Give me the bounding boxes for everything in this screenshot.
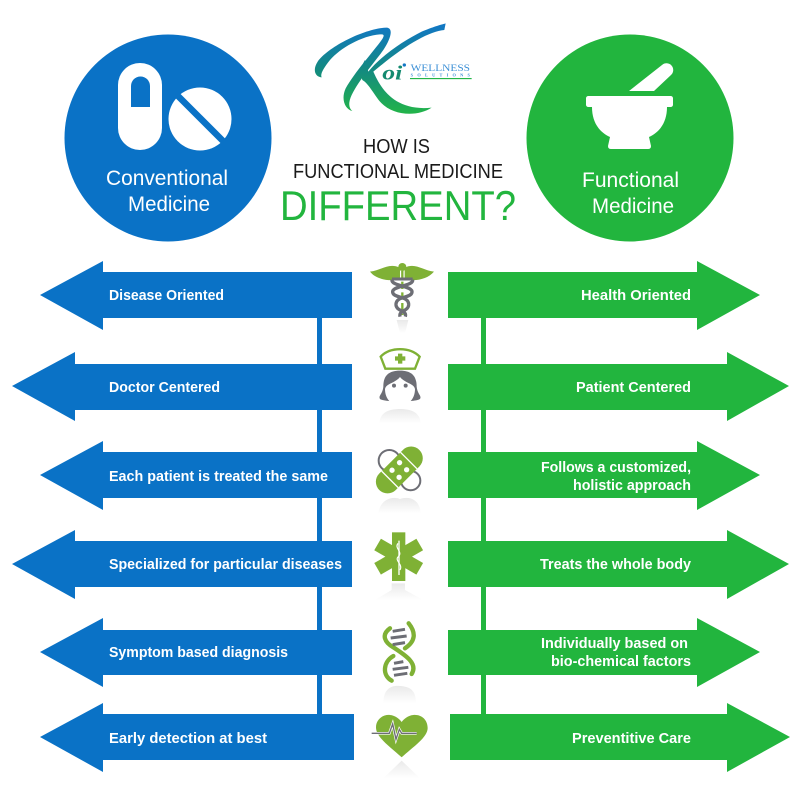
heading: Functional Medicine: Medicine: [592, 195, 674, 218]
arrow: Treats the whole body: [448, 530, 789, 599]
heading: Conventional Medicine: Conventional: [106, 167, 228, 190]
arrow: Doctor Centered: [12, 352, 352, 421]
logo: Koi Wellness Solutions: oi: [382, 62, 403, 84]
icon: caduceus: [370, 263, 434, 333]
icon: heart with pulse: [372, 715, 428, 778]
heading: Conventional Medicine: Medicine: [128, 193, 210, 216]
arrow: Patient Centered: [448, 352, 789, 421]
arrow: Doctor Centered: Doctor Centered: [109, 380, 220, 396]
title: FUNCTIONAL MEDICINE: [293, 161, 503, 183]
arrow: Patient Centered: Patient Centered: [576, 380, 691, 396]
logo: Koi Wellness Solutions: WELLNESS: [411, 63, 470, 73]
arrow: Treats the whole body: Treats the whole body: [540, 557, 691, 573]
icon: mortar and pestle: [586, 63, 673, 149]
arrow: Follows a customized, holistic approach: Follows a customized,: [541, 460, 691, 476]
icon: star of life: [374, 532, 423, 600]
arrow: Follows a customized, holistic approach: holistic approach: [573, 478, 691, 494]
arrow: Each patient is treated the same: [40, 441, 352, 510]
title: [280, 136, 516, 229]
arrow: Health Oriented: [448, 261, 760, 330]
arrow: Follows a customized, holistic approach: [448, 441, 760, 510]
title: HOW IS: [363, 136, 430, 158]
panel: functional medicine badge: [526, 34, 734, 242]
icon: capsule and tablet: [118, 63, 232, 150]
arrow: Each patient is treated the same: Each patient is treated the same: [109, 469, 328, 485]
panel: conventional medicine badge: [64, 34, 272, 242]
connector: green column line: [481, 318, 486, 714]
arrow: Disease Oriented: [40, 261, 352, 330]
title: DIFFERENT?: [280, 182, 516, 229]
arrow: Early detection at best: Early detection at best: [109, 731, 267, 747]
arrow: Specialized for particular diseases: [12, 530, 352, 599]
icon: DNA helix: [383, 623, 416, 703]
arrow: Individually based on bio-chemical factors: Individually based on: [541, 636, 688, 652]
arrow: Specialized for particular diseases: Specialized for particular diseases: [109, 557, 342, 573]
arrow: Early detection at best: [40, 703, 354, 772]
arrow: Symptom based diagnosis: [40, 618, 352, 687]
arrow: Preventitive Care: Preventitive Care: [572, 731, 691, 747]
arrow: Health Oriented: Health Oriented: [581, 288, 691, 304]
arrow: Individually based on bio-chemical factors: bio-chemical factors: [551, 654, 691, 670]
heading: Functional Medicine: Functional: [582, 169, 679, 192]
arrow: Disease Oriented: Disease Oriented: [109, 288, 224, 304]
icon: bandage: [371, 442, 428, 513]
arrow: Preventitive Care: [450, 703, 790, 772]
connector: blue column line: [317, 318, 322, 714]
arrow: Individually based on bio-chemical factors: [448, 618, 760, 687]
arrow: Symptom based diagnosis: Symptom based diagnosis: [109, 645, 288, 661]
heading: Conventional Medicine: [106, 167, 228, 216]
icon: nurse: [379, 349, 421, 423]
logo: Koi Wellness Solutions: SOLUTIONS: [411, 73, 471, 78]
heading: Functional Medicine: [582, 169, 679, 218]
logo: Koi Wellness Solutions: [315, 23, 472, 114]
